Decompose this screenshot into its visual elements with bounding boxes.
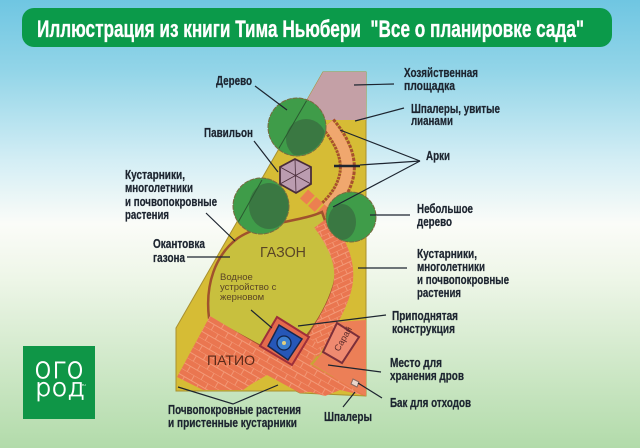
service yard (300, 72, 366, 120)
label: lawn edging (153, 237, 206, 265)
label: shrubs left (125, 168, 217, 222)
logo (23, 346, 95, 419)
label: ground cover: и пристенные кустарники (168, 416, 297, 430)
label: trellis with vines: Шпалеры, увитые (411, 102, 500, 116)
water feature (260, 317, 309, 365)
yard edging (311, 333, 337, 378)
label: shrubs right: растения (417, 286, 461, 300)
label: service yard (404, 66, 478, 93)
garden plan (176, 72, 376, 396)
tree (268, 98, 326, 159)
label: raised structure: конструкция (392, 322, 455, 336)
label: ground cover (168, 403, 301, 430)
leader lines (178, 84, 420, 407)
title banner (22, 8, 612, 47)
label: shrubs right: и почвопокровные (417, 273, 509, 287)
label: lawn edging: Окантовка (153, 237, 206, 251)
label: shrubs left: растения (125, 208, 169, 222)
patio text: ПАТИО (207, 352, 255, 368)
label: shrubs right: Кустарники, (417, 247, 477, 261)
label: waste bin: Бак для отходов (390, 396, 471, 410)
label: trellis with vines: лианами (411, 114, 453, 128)
label: shrubs right (417, 247, 509, 300)
shed: Сарай (332, 325, 354, 353)
label: service yard: Хозяйственная (404, 66, 478, 80)
label: tree: Дерево (216, 74, 252, 88)
water feature text: жерновом (220, 292, 264, 303)
water feature text (220, 272, 277, 303)
label: pavilion: Павильон (204, 126, 253, 140)
upper arc path (327, 124, 347, 208)
pavilion (280, 159, 311, 193)
logo: ого (34, 351, 84, 385)
label: raised structure (392, 309, 458, 336)
label: service yard: площадка (404, 79, 456, 93)
label: ground cover: Почвопокровные растения (168, 403, 301, 417)
small tree (326, 192, 376, 242)
label: firewood (390, 356, 464, 383)
label: firewood: хранения дров (390, 369, 464, 383)
lawn text: ГАЗОН (260, 244, 306, 261)
label: small tree: дерево (417, 215, 452, 229)
label: shrubs left: многолетники (125, 181, 193, 195)
label: shrubs left: и почвопокровные (125, 195, 217, 209)
water feature text: устройство с (220, 282, 277, 293)
plot base (176, 72, 366, 396)
label: trellis: Шпалеры (324, 410, 372, 424)
stepping stones (304, 194, 326, 214)
label: shrubs right: многолетники (417, 260, 485, 274)
shed (323, 323, 359, 363)
label: small tree (417, 202, 473, 229)
waste bin (351, 379, 359, 387)
label: shrubs left: Кустарники, (125, 168, 185, 182)
logo: род (35, 373, 85, 402)
water feature text: Водное (220, 272, 253, 283)
label: lawn edging: газона (153, 251, 186, 265)
right orange yard (310, 320, 366, 396)
label: raised structure: Приподнятая (392, 309, 458, 323)
lawn (208, 212, 336, 347)
label: arches: Арки (426, 149, 450, 163)
logo: ru (82, 382, 86, 387)
label: trellis with vines (411, 102, 500, 128)
label: firewood: Место для (390, 356, 442, 370)
label: small tree: Небольшое (417, 202, 473, 216)
tree (233, 178, 289, 234)
patio (177, 316, 366, 396)
brick path (310, 222, 344, 352)
